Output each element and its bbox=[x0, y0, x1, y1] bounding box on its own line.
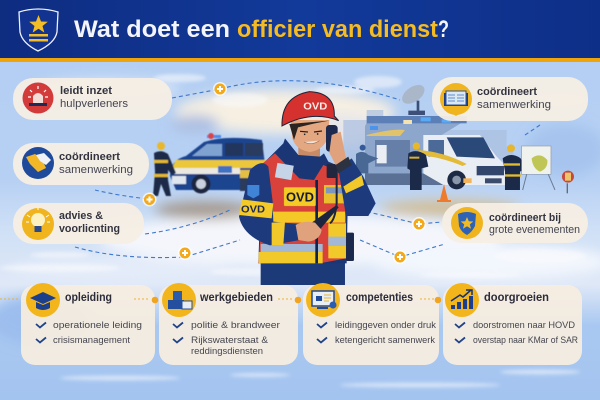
checklist bbox=[36, 320, 142, 346]
checklist: leidinggeven onder druk bbox=[335, 320, 436, 331]
checklist: operationele leiding bbox=[53, 320, 142, 331]
checklist: reddingsdiensten bbox=[191, 346, 263, 357]
checklist: overstap naar KMar of SAR bbox=[473, 335, 578, 346]
right arm sleeve bbox=[338, 158, 376, 216]
left arm sleeve bbox=[239, 163, 300, 245]
phone and hand bbox=[326, 125, 352, 173]
pill: advies en voorlichting: voorlicnting bbox=[59, 223, 120, 235]
card: doorgroeien bbox=[443, 283, 582, 365]
title: Wat doet een bbox=[74, 16, 230, 43]
pill: coordineert samenwerking rechts bbox=[432, 77, 588, 121]
icon: star shield bbox=[451, 207, 483, 239]
icon: shield badge bbox=[19, 9, 58, 51]
pill: coordineert bij grote evenementen: grote evenementen bbox=[489, 224, 580, 236]
connector lines bbox=[75, 81, 540, 258]
card: werkgebieden: werkgebieden bbox=[199, 292, 273, 304]
pill: coordineert samenwerking links bbox=[13, 143, 149, 185]
checklist bbox=[455, 320, 578, 346]
checklist bbox=[317, 320, 436, 346]
pill: coordineert bij grote evenementen bbox=[442, 203, 588, 243]
jacket torso bbox=[258, 138, 348, 263]
checklist: politie & brandweer bbox=[191, 320, 280, 331]
responder left bbox=[153, 142, 176, 196]
checklist: doorstromen naar HOVD bbox=[473, 320, 575, 331]
card connectors bbox=[0, 297, 441, 303]
chest badge: OVD bbox=[286, 189, 314, 204]
pill: coordineert samenwerking rechts: samenwerking bbox=[477, 99, 551, 111]
icon: siren bbox=[22, 82, 54, 114]
card: doorgroeien: doorgroeien bbox=[484, 292, 549, 304]
map board bbox=[522, 146, 555, 190]
pill: coordineert samenwerking links: coördineert bbox=[59, 151, 120, 163]
header bar bbox=[0, 0, 600, 62]
pill: advies en voorlichting: advies & bbox=[59, 210, 103, 222]
scene: command van, dish, crew and map bbox=[343, 81, 574, 193]
van cab bbox=[423, 135, 507, 185]
title: ? bbox=[438, 16, 449, 43]
road sign bbox=[562, 171, 574, 193]
pill: leidt inzet hulpverleners bbox=[13, 78, 172, 120]
card: competenties bbox=[303, 283, 439, 365]
title bbox=[74, 16, 449, 43]
checklist: ketengericht samenwerk bbox=[335, 335, 435, 346]
radio and hand bbox=[296, 164, 354, 261]
pill: leidt inzet hulpverleners: hulpverleners bbox=[60, 98, 129, 110]
vest bbox=[258, 153, 346, 263]
checklist bbox=[173, 320, 280, 357]
pill: coordineert bij grote evenementen: coördineert bij bbox=[489, 212, 561, 224]
pill: coordineert samenwerking rechts: coördineert bbox=[477, 86, 537, 98]
pill: leidt inzet hulpverleners: leidt inzet bbox=[60, 85, 112, 97]
card: opleiding bbox=[21, 283, 155, 365]
card: opleiding: opleiding bbox=[65, 292, 112, 304]
central figure: officer of duty bbox=[239, 92, 376, 285]
helmet: OVD bbox=[303, 101, 328, 112]
scene: police car and responder bbox=[153, 133, 268, 196]
icon: tablet bbox=[440, 83, 472, 116]
crew: three responders bbox=[356, 142, 526, 190]
icon: graduation cap bbox=[26, 283, 60, 317]
central figure: officer of duty: OVD bbox=[241, 205, 266, 216]
card: competenties: competenties bbox=[346, 292, 413, 304]
road cone bbox=[437, 184, 451, 202]
arm patch bbox=[247, 185, 259, 198]
icon: buildings bbox=[162, 283, 196, 317]
neck bbox=[298, 140, 320, 162]
pill: advies en voorlichting bbox=[13, 203, 144, 244]
checklist: crisismanagement bbox=[53, 335, 130, 346]
connector markers bbox=[142, 82, 426, 264]
dish bbox=[399, 81, 428, 115]
card: werkgebieden bbox=[159, 283, 298, 365]
van body bbox=[365, 119, 468, 173]
title: officier van dienst bbox=[237, 16, 438, 43]
left sleeve stripe bbox=[272, 222, 285, 245]
icon: handshake bbox=[22, 147, 54, 179]
pill: coordineert samenwerking links: samenwerking bbox=[59, 164, 133, 176]
checklist: Rijkswaterstaat & bbox=[191, 335, 269, 346]
buildings behind van bbox=[343, 110, 513, 173]
icon: light bulb bbox=[22, 208, 54, 240]
helmet bbox=[282, 92, 339, 126]
legs bbox=[261, 262, 345, 285]
armband bbox=[239, 199, 273, 218]
head bbox=[291, 120, 329, 152]
icon: monitor bbox=[306, 283, 340, 317]
icon: growth chart bbox=[445, 283, 479, 317]
